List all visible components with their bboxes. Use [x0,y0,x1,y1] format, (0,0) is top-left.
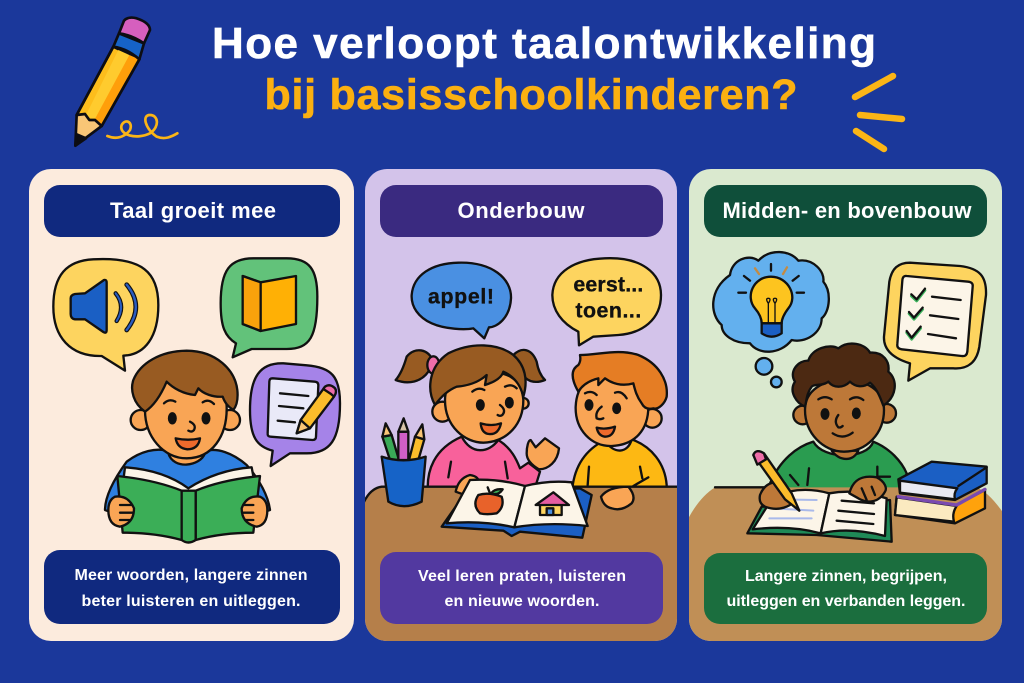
title: Hoe verloopt taalontwikkeling [212,19,876,68]
figure: boy [770,344,907,497]
figure: boy [105,351,270,542]
panel: Midden- en bovenbouw [688,169,1010,673]
icon: picture book [442,480,592,538]
text block: summary: uitleggen en verbanden leggen. [726,593,966,610]
text block: summary: beter luisteren en uitleggen. [82,593,300,610]
table [365,486,677,641]
title [212,19,876,119]
icon: open notebook [747,451,892,542]
illustration: boy reading with speech bubbles [53,258,340,542]
icon: sparkle rays [855,76,902,149]
hand of girl [456,475,479,495]
heading: Onderbouw: Onderbouw [458,198,585,223]
speech bubble: appel! [412,263,511,338]
illustration: two children talking over a picture book [365,257,677,641]
text block: summary [44,550,340,624]
icon: pencil cup [382,418,426,506]
hand of boy [601,487,634,509]
speech bubble: eerst... toen...: toen... [575,298,641,322]
icon: speaker bubble [53,259,158,371]
icon: thought cloud with light bulb [713,252,829,387]
text block: summary: Veel leren praten, luisteren [418,568,626,585]
icon: writing bubble [250,363,340,466]
title: bij basisschoolkinderen? [264,71,798,119]
heading: Taal groeit mee: Taal groeit mee [110,198,276,223]
speech bubble: eerst... toen... [552,258,661,345]
illustration: boy writing with idea and checklist [688,252,1010,673]
speech bubble: eerst... toen...: eerst... [573,273,643,297]
heading: Taal groeit mee [44,185,340,237]
heading: Midden- en bovenbouw: Midden- en bovenbouw [722,198,972,223]
figure: boy [572,352,667,503]
text block: summary: Meer woorden, langere zinnen [74,567,308,584]
heading: Midden- en bovenbouw [704,185,987,237]
text block: summary: en nieuwe woorden. [444,593,600,610]
text block: summary [704,553,987,624]
icon: checklist bubble [884,263,986,381]
heading: Onderbouw [380,185,663,237]
text block: summary [380,552,663,624]
text block: summary: Langere zinnen, begrijpen, [745,568,947,585]
icon: pencil with squiggle [75,18,177,146]
figure: girl [396,345,559,497]
speech bubble: appel!: appel! [428,284,494,308]
table [689,487,1002,641]
panel: Onderbouw [363,169,685,673]
icon: stack of books [895,462,987,523]
icon: book bubble [221,258,317,357]
panel: Taal groeit mee [29,169,354,641]
